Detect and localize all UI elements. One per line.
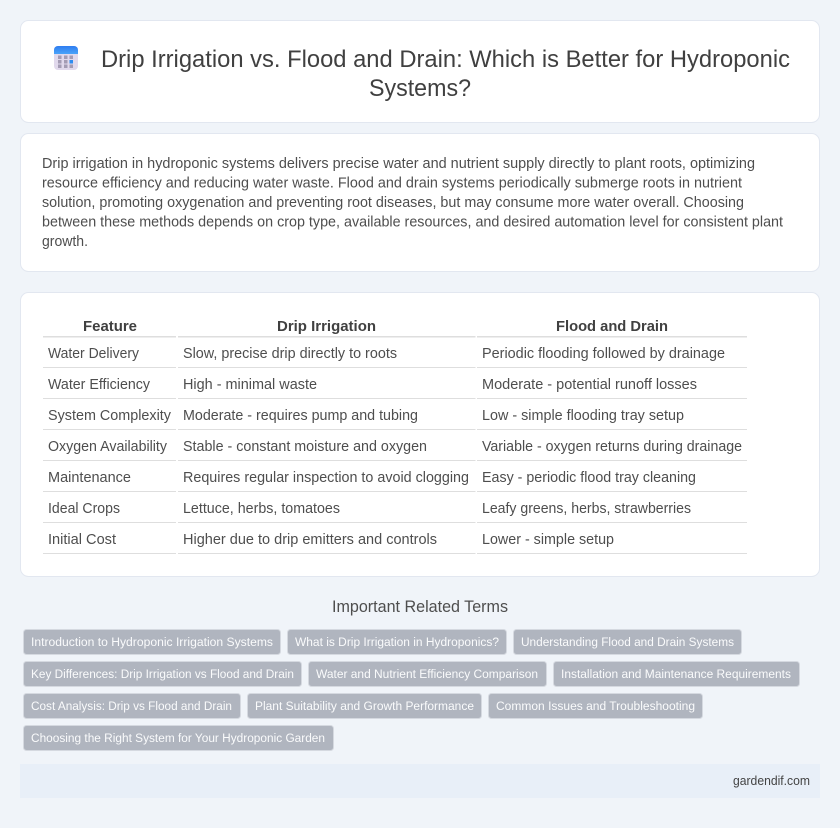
table row: initial cost: Initial Cost bbox=[48, 532, 116, 548]
table header row: Feature bbox=[83, 318, 137, 335]
text block: summary paragraph: solution, promoting oxygenation and preventing root diseases, but may consume more water overall. Choosing bbox=[42, 195, 744, 211]
table row: system complexity: Moderate - requires pump and tubing bbox=[183, 408, 418, 424]
tag bbox=[24, 662, 302, 686]
table row: oxygen availability: Variable - oxygen returns during drainage bbox=[482, 439, 742, 455]
footer source text: gardendif.com bbox=[733, 774, 810, 788]
table header row: Drip Irrigation bbox=[277, 318, 376, 335]
tag bbox=[24, 630, 280, 654]
table row: water efficiency: High - minimal waste bbox=[183, 377, 317, 393]
tag: Common Issues and Troubleshooting bbox=[496, 699, 695, 713]
panel: title card bbox=[20, 20, 820, 122]
heading: page title: Drip Irrigation vs. Flood and Drain: Which is Better for Hydroponic bbox=[101, 46, 790, 73]
table row: ideal crops: Lettuce, herbs, tomatoes bbox=[183, 501, 340, 517]
table row: initial cost: Lower - simple setup bbox=[482, 532, 614, 548]
table row: maintenance: Maintenance bbox=[48, 470, 131, 486]
tag bbox=[514, 630, 742, 654]
table header row: Flood and Drain bbox=[556, 318, 668, 335]
table row: water delivery: Slow, precise drip directly to roots bbox=[183, 346, 397, 362]
table row: ideal crops: Ideal Crops bbox=[48, 501, 120, 517]
tag bbox=[24, 694, 240, 718]
tag list: related terms bbox=[24, 630, 800, 750]
tag: Choosing the Right System for Your Hydroponic Garden bbox=[31, 731, 325, 745]
tag bbox=[24, 726, 334, 750]
tag: Installation and Maintenance Requirements bbox=[561, 667, 791, 681]
table row: system complexity: Low - simple flooding tray setup bbox=[482, 408, 684, 424]
table row: water delivery: Periodic flooding followed by drainage bbox=[482, 346, 725, 362]
heading: page title bbox=[101, 46, 790, 102]
panel: comparison table bbox=[20, 292, 820, 576]
tag: Water and Nutrient Efficiency Comparison bbox=[316, 667, 538, 681]
text block: summary paragraph bbox=[42, 156, 783, 250]
tag: Cost Analysis: Drip vs Flood and Drain bbox=[31, 699, 232, 713]
text block: summary paragraph: Drip irrigation in hydroponic systems delivers precise water and nutrient supply directly to plant roots, optimizing bbox=[42, 156, 755, 172]
table row: maintenance: Requires regular inspection to avoid clogging bbox=[183, 470, 469, 486]
tag: Plant Suitability and Growth Performance bbox=[255, 699, 474, 713]
table row: oxygen availability: Oxygen Availability bbox=[48, 439, 168, 455]
table row: system complexity bbox=[48, 408, 684, 424]
table row: water efficiency: Moderate - potential runoff losses bbox=[482, 377, 697, 393]
table row: oxygen availability: Stable - constant moisture and oxygen bbox=[183, 439, 427, 455]
tag bbox=[488, 694, 702, 718]
table row: oxygen availability bbox=[48, 439, 742, 455]
table row: ideal crops: Leafy greens, herbs, strawberries bbox=[482, 501, 691, 517]
icon: calendar grid bbox=[54, 46, 78, 70]
panel: introduction text bbox=[20, 134, 820, 272]
table row: water delivery: Water Delivery bbox=[48, 346, 140, 362]
text block: summary paragraph: growth. bbox=[42, 234, 88, 250]
table row: ideal crops bbox=[48, 501, 691, 517]
table row: maintenance bbox=[48, 470, 696, 486]
table row: water efficiency bbox=[48, 377, 697, 393]
tag: Key Differences: Drip Irrigation vs Flood and Drain bbox=[31, 667, 294, 681]
footer bar bbox=[20, 764, 820, 798]
tag bbox=[248, 694, 482, 718]
tag: Introduction to Hydroponic Irrigation Systems bbox=[31, 635, 273, 649]
tag: What is Drip Irrigation in Hydroponics? bbox=[295, 635, 499, 649]
heading: important related terms: Important Related Terms bbox=[332, 598, 508, 616]
text block: summary paragraph: between these methods depends on crop type, available resources, and desired automation level for consistent plant bbox=[42, 214, 783, 230]
table row: system complexity: System Complexity bbox=[48, 408, 172, 424]
text block: summary paragraph: resource efficiency and reducing water waste. Flood and drain systems periodically submerge roots in nutrient bbox=[42, 176, 742, 192]
table row: maintenance: Easy - periodic flood tray cleaning bbox=[482, 470, 696, 486]
table row: initial cost bbox=[48, 532, 614, 548]
table row: water efficiency: Water Efficiency bbox=[48, 377, 151, 393]
table row: initial cost: Higher due to drip emitters and controls bbox=[183, 532, 437, 548]
tag bbox=[308, 662, 546, 686]
table row: water delivery bbox=[48, 346, 725, 362]
tag bbox=[288, 630, 506, 654]
tag: Understanding Flood and Drain Systems bbox=[521, 635, 734, 649]
heading: page title: Systems? bbox=[369, 75, 471, 102]
tag bbox=[554, 662, 800, 686]
table header row bbox=[83, 318, 668, 335]
